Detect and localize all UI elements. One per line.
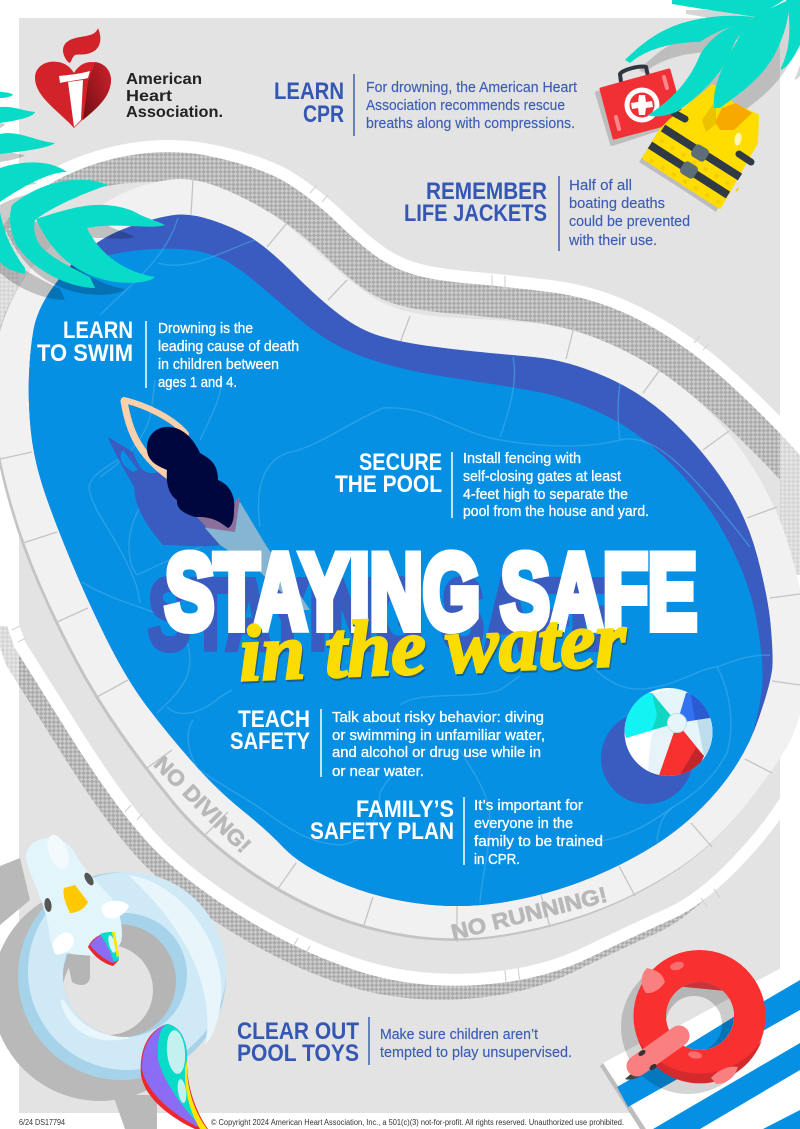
heading: LIFE JACKETS (404, 200, 547, 227)
heading: CPR (303, 101, 344, 128)
title: in the water: in the water (239, 598, 630, 700)
tip: remember life jackets (404, 176, 690, 251)
logo: american heart association (35, 28, 223, 128)
heading: REMEMBER (426, 178, 547, 205)
heading: SECURE (359, 449, 442, 476)
heading (230, 706, 310, 755)
pool water (28, 214, 773, 906)
swan beak rainbow (88, 932, 119, 966)
footer: document code: 6/24 DS17794 (19, 1118, 65, 1127)
heading: LEARN (63, 317, 133, 344)
body text (332, 710, 545, 780)
body text: or near water. (332, 764, 424, 780)
icon: flamingo float (621, 950, 766, 1094)
body text: leading cause of death (158, 339, 299, 355)
body text (366, 80, 577, 132)
body text: could be prevented (569, 214, 690, 230)
swimmer (108, 400, 310, 610)
body text: ages 1 and 4. (158, 375, 237, 391)
body text: everyone in the (474, 816, 573, 832)
icon: beach ball (601, 685, 720, 804)
body text: boating deaths (569, 196, 665, 212)
body text: family to be trained (474, 834, 603, 850)
plant: top right leaves (625, 0, 800, 116)
body text: tempted to play unsupervised. (380, 1045, 572, 1061)
body text: For drowning, the American Heart (366, 80, 577, 96)
body text: Association recommends rescue (366, 98, 565, 114)
body text: or swimming in unfamiliar water, (332, 728, 545, 744)
body text: with their use. (568, 233, 657, 249)
body text: Half of all (569, 178, 632, 194)
body text (380, 1027, 572, 1061)
heading: THE POOL (335, 471, 442, 498)
heading: CLEAR OUT (237, 1018, 359, 1045)
heading (274, 78, 344, 128)
swan head (26, 832, 129, 956)
tip: secure the pool (335, 449, 649, 520)
body text: self-closing gates at least (463, 469, 621, 485)
heading: TEACH (238, 706, 310, 733)
body text (568, 178, 690, 249)
label: no diving: NO DIVING! (149, 751, 256, 858)
label: no running: NO RUNNING! (448, 882, 610, 945)
body text: Make sure children aren’t (380, 1027, 538, 1043)
tip: family's safety plan (310, 796, 603, 868)
body text (474, 798, 603, 868)
pool coping with tiles (0, 179, 800, 942)
body text: Drowning is the (158, 321, 253, 337)
icon: life jacket (639, 85, 758, 212)
heading: TO SWIM (37, 340, 133, 367)
ring shadow (0, 858, 208, 1129)
tip: teach safety (230, 706, 545, 780)
swan tail rainbow (141, 1024, 208, 1129)
tip: learn cpr (274, 74, 577, 136)
icon: beach towel (600, 958, 800, 1129)
icon: heart and torch (35, 28, 111, 128)
heading: POOL TOYS (237, 1040, 359, 1067)
tip: learn to swim (37, 317, 299, 391)
logo wordmark: Association. (126, 104, 223, 121)
logo wordmark: American (126, 71, 202, 88)
body text: in CPR. (474, 852, 520, 868)
icon: swan float (0, 832, 226, 1129)
body text: pool from the house and yard. (463, 504, 649, 520)
body text: Install fencing with (463, 451, 581, 467)
heading: SAFETY PLAN (310, 818, 454, 845)
body text: Talk about risky behavior: diving (332, 710, 544, 726)
body text (158, 321, 299, 391)
logo wordmark (126, 71, 223, 121)
heading (404, 178, 547, 227)
tip: clear out pool toys (237, 1017, 572, 1067)
heading: LEARN (274, 78, 344, 105)
heading: SAFETY (230, 728, 310, 755)
body text: It’s important for (474, 798, 583, 814)
body text: 4-feet high to separate the (463, 487, 628, 503)
plant: left leaves (0, 92, 165, 300)
heading: FAMILY’S (356, 796, 454, 823)
body text: breaths along with compressions. (366, 116, 575, 132)
shadow of top right leaves (639, 10, 800, 126)
heading (335, 449, 442, 498)
heading (310, 796, 454, 845)
body text: and alcohol or drug use while in (332, 745, 541, 761)
icon: first aid kit (597, 67, 683, 144)
heading (237, 1018, 359, 1067)
logo wordmark: Heart (126, 88, 173, 105)
title: in the water: in the water (237, 596, 628, 698)
heading (37, 317, 133, 367)
body text: in children between (158, 357, 279, 373)
footer: copyright: © Copyright 2024 American Heart Association, Inc., a 501(c)(3) not-for-profit. All rights reserved. Unauthorized use prohibited. (211, 1118, 624, 1127)
body text (463, 451, 649, 520)
